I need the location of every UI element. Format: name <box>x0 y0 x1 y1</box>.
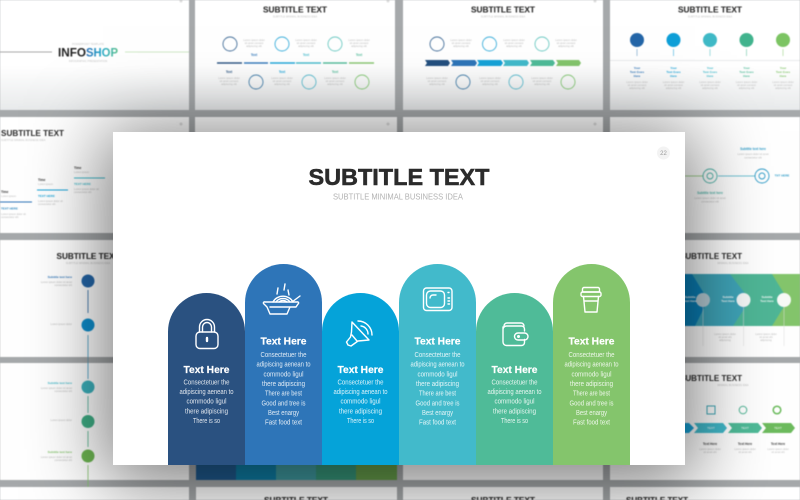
thumbnail: stepped timeline: Time <box>1 190 9 194</box>
text block: Fast food text <box>419 420 456 426</box>
text block: there adipiscing <box>570 381 613 388</box>
thumbnail: icons with chevrons: sit amet consect <box>452 41 471 45</box>
thumbnail: icons with chevrons: adipiscing elit <box>482 82 498 86</box>
text block: adipiscing aenean to <box>256 362 311 368</box>
thumbnail: icons with line bars: Text <box>251 53 258 57</box>
thumbnail: right circle flow: Lorem ipsum dolor sit amet <box>694 196 726 200</box>
thumbnail: icons with chevrons: sit amet consect <box>481 79 500 83</box>
text block <box>564 352 619 426</box>
thumbnail: vertical timeline: SUBTITLE TEXT <box>56 252 120 261</box>
thumbnail: icons with line bars: Lorem ipsum dolor <box>295 38 317 42</box>
panel: column 3 speaker <box>322 293 399 465</box>
heading: Text Here <box>414 336 461 348</box>
thumbnail: icons with line bars: Lorem ipsum dolor <box>271 76 293 80</box>
thumbnail: five circle pins: Here <box>707 74 714 78</box>
text block: commodo ligul <box>340 399 381 406</box>
text block: there adipiscing <box>339 408 382 416</box>
thumbnail: three chevrons with icons: Text Here <box>738 442 752 446</box>
text block: commodo ligul <box>494 399 535 406</box>
thumbnail: three chevrons with icons: TEXT <box>707 426 715 430</box>
thumbnail: right circle flow: TXT HERE <box>775 174 789 178</box>
thumbnail: icons with line bars: sit amet consect <box>350 41 369 45</box>
thumbnail: icons with chevrons <box>403 0 603 110</box>
text block: Good and tree is <box>416 400 460 407</box>
thumbnail: five circle pins: Text Goes <box>666 70 681 74</box>
thumbnail: icons with line bars: Text <box>332 70 339 74</box>
thumbnail: right circle flow: Lorem ipsum dolor sit amet <box>737 152 769 156</box>
thumbnail: three chevrons with icons: sit amet elit <box>703 450 717 454</box>
thumbnail: icons with chevrons: adipiscing elit <box>534 82 550 86</box>
text block <box>410 352 465 426</box>
text block: Good and tree is <box>570 400 614 407</box>
thumbnail: vertical timeline <box>41 252 120 500</box>
thumbnail: vertical timeline: Subtitle text here <box>48 275 72 279</box>
text block: There is so <box>501 418 528 425</box>
thumbnail: stepped timeline: SUBTITLE TEXT <box>1 129 64 138</box>
text block: commodo ligul <box>418 371 458 378</box>
thumbnail: vertical timeline: Lorem ipsum dolor <box>51 322 72 326</box>
thumbnail: icons with chevrons: adipiscing elit <box>506 44 522 48</box>
text block: Consectetuer the <box>492 380 538 386</box>
thumbnail: chevron gradient band: sit amet elit <box>759 335 773 339</box>
thumbnail: stepped timeline: Lorem ipsum dolor sit <box>1 212 26 216</box>
text block: adipiscing aenean to <box>564 362 619 368</box>
thumbnail: five circle pins: sit amet consect <box>774 83 793 87</box>
thumbnail: vertical timeline: Subtitle text here <box>48 450 72 454</box>
thumbnail: cover slide <box>0 0 189 110</box>
thumbnail: stepped timeline <box>0 129 105 219</box>
text block: there adipiscing <box>416 381 459 388</box>
thumbnail: icons with line bars: Text <box>226 70 233 74</box>
text block: commodo ligul <box>264 371 304 378</box>
text block: Best enargy <box>422 410 453 417</box>
thumbnail: vertical timeline: consectetur elit <box>55 389 72 393</box>
thumbnail: icons with line bars: SUBTITLE MINIMAL BUSINESS IDEA <box>273 14 317 18</box>
thumbnail: icons with line bars: Text <box>356 53 363 57</box>
thumbnail: icons with line bars: adipiscing elit <box>351 44 367 48</box>
page number badge <box>657 146 670 160</box>
panel: column 5 wallet <box>476 293 553 465</box>
thumbnail: icons with chevrons: Lorem ipsum dolor <box>426 76 448 80</box>
panel: column 4 television <box>399 264 476 465</box>
thumbnail: five circle pins: Your <box>707 66 714 70</box>
thumbnail: icons with line bars: Lorem ipsum dolor <box>243 38 265 42</box>
text block: There are best <box>573 390 610 398</box>
text block: adipiscing aenean to <box>410 362 465 368</box>
thumbnail: icons with line bars: Lorem ipsum dolor <box>324 76 346 80</box>
thumbnail: five circle pins: adipiscing elit <box>775 86 791 90</box>
text block: There are best <box>419 390 456 398</box>
main white slide panel <box>113 132 685 465</box>
text block: commodo ligul <box>572 371 612 378</box>
text block <box>256 352 311 426</box>
panel: column 6 coffee cup <box>553 264 630 465</box>
thumbnail: five circle pins: Lorem ipsum dolor <box>772 80 794 84</box>
thumbnail: right circle flow: consectetur elit <box>701 200 719 204</box>
thumbnail: dark chevron strip under main slide <box>196 460 397 480</box>
thumbnail: icons with line bars: Text <box>303 53 310 57</box>
thumbnail: icons with line bars: Lorem ipsum dolor <box>348 38 370 42</box>
thumbnail: five circle pins: Lorem ipsum dolor <box>699 80 721 84</box>
thumbnail: stepped timeline: Lorem ipsum <box>38 182 53 186</box>
thumbnail: five circle pins: Text Goes <box>703 70 717 74</box>
icon: padlock <box>196 320 218 348</box>
thumbnail: chevron gradient band: Text Here <box>760 299 774 303</box>
thumbnail: three chevrons with icons: MINIMAL BUSINESS IDEA <box>717 383 749 387</box>
page number badge: 22 <box>660 151 667 157</box>
thumbnail: icons with chevrons: adipiscing elit <box>453 44 469 48</box>
thumbnail: right circle flow: consectetur elit <box>744 156 762 160</box>
icon: television <box>424 288 452 310</box>
thumbnail: five circle pins: Your <box>670 66 678 70</box>
thumbnail: five circle pins: sit amet consect <box>701 83 720 87</box>
thumbnail: three chevrons with icons: sit amet elit <box>771 450 785 454</box>
thumbnail: five circle pins: Your <box>780 66 787 70</box>
text block: Good and tree is <box>262 400 306 407</box>
text block: Consectetuer the <box>184 380 230 386</box>
thumbnail: icons with line bars: Lorem ipsum dolor <box>218 76 240 80</box>
thumbnail: icons with chevrons: Lorem ipsum dolor <box>479 76 501 80</box>
text block: There is so <box>193 418 220 425</box>
text block: Best enargy <box>268 410 299 417</box>
thumbnail: chevron gradient band: Text Here <box>683 299 697 303</box>
thumbnail: icons with line bars: adipiscing elit <box>327 82 343 86</box>
thumbnail: stepped timeline: Lorem ipsum dolor sit <box>74 187 99 191</box>
thumbnail: five circle pins: SUBTITLE TEXT <box>678 6 742 14</box>
text block: there adipiscing <box>493 408 536 416</box>
thumbnail rows 3 and 4 tiles <box>0 240 800 480</box>
subtitle: SUBTITLE MINIMAL BUSINESS IDEA <box>333 192 463 202</box>
thumbnail: right circle flow <box>685 147 789 204</box>
thumbnail: icons with line bars: SUBTITLE TEXT <box>263 6 327 14</box>
text block: adipiscing aenean to <box>488 389 542 396</box>
thumbnail: icons with line bars: sit amet consect <box>273 79 292 83</box>
text block <box>334 380 388 425</box>
thumbnail: three chevrons with icons: Lorem ipsum dolor <box>734 447 756 451</box>
thumbnail: vertical timeline: Lorem ipsum dolor sit amet <box>41 455 72 459</box>
thumbnail: icons with line bars: sit amet consect <box>245 41 264 45</box>
thumbnail: vertical timeline: Subtitle text here <box>48 381 72 385</box>
thumbnail: three chevrons with icons: Text Here <box>771 442 785 446</box>
thumbnail: cover slide: POWERPOINT TEMPLATE <box>72 42 104 46</box>
text block: commodo ligul <box>186 399 227 406</box>
thumbnail: five circle pins: Text Goes <box>776 70 790 74</box>
thumbnail: five circle pins: adipiscing elit <box>629 86 645 90</box>
thumbnail: icons with chevrons: sit amet consect <box>533 79 552 83</box>
thumbnail: cover slide: SHOP <box>86 46 118 60</box>
text block: Consectetuer the <box>260 352 307 359</box>
thumbnail: right circle flow: Subtitle text here <box>697 191 723 195</box>
thumbnail: chevron gradient band: adipiscing <box>760 338 772 342</box>
thumbnail: stepped timeline: SUBTITLE MINIMAL BUSINESS IDEA <box>1 138 46 142</box>
thumbnail: stepped timeline: Lorem ipsum <box>1 194 16 198</box>
thumbnail: vertical timeline: Lorem ipsum dolor <box>51 418 72 422</box>
text block <box>488 380 542 425</box>
text block: Consectetuer the <box>414 352 461 359</box>
heading: Text Here <box>260 336 307 348</box>
thumbnail: icons with chevrons: SUBTITLE TEXT <box>471 6 535 14</box>
text block: Fast food text <box>265 420 302 426</box>
thumbnail: icons with chevrons: SUBTITLE MINIMAL BUSINESS IDEA <box>481 14 525 18</box>
thumbnail: chevron gradient band: Subtitle <box>684 295 696 299</box>
thumbnail: icons with chevrons: Lorem ipsum dolor <box>531 76 553 80</box>
thumbnail: icons with chevrons: Lorem ipsum dolor <box>503 38 525 42</box>
thumbnail: three chevrons with icons: sit amet elit <box>738 450 752 454</box>
thumbnail: stepped timeline: TEXT HERE <box>1 206 18 210</box>
text block: Fast food text <box>573 420 610 426</box>
thumbnail: cover slide: INFOGRAPHIC PRESENTATION <box>69 59 107 63</box>
thumbnail row 5 tiles <box>0 487 800 500</box>
thumbnail: icons with chevrons: adipiscing elit <box>429 82 445 86</box>
heading: Text Here <box>338 364 384 376</box>
thumbnail: icons with chevrons: Lorem ipsum dolor <box>555 38 577 42</box>
thumbnail: five circle pins: SUBTITLE MINIMAL BUSINESS IDEA <box>688 14 732 18</box>
text block: there adipiscing <box>262 381 305 388</box>
thumbnail: icons with line bars: adipiscing elit <box>274 82 290 86</box>
thumbnail: vertical timeline: consectetur elit <box>55 458 72 462</box>
thumbnail: five circle pins: Lorem ipsum dolor <box>663 80 684 84</box>
icon: wallet <box>503 323 528 346</box>
thumbnail: three chevrons with icons: SUBTITLE TEXT <box>680 374 742 383</box>
thumbnail: five circle pins: Lorem ipsum dolor <box>736 80 757 84</box>
thumbnail: five circle pins: sit amet consect <box>737 83 756 87</box>
thumbnail: chevron gradient band: adipiscing <box>719 338 731 342</box>
thumbnail: stepped timeline: Lorem ipsum dolor sit <box>38 199 63 203</box>
thumbnail: five circle pins: Lorem ipsum dolor <box>626 80 648 84</box>
thumbnail: five circle pins: adipiscing elit <box>739 86 755 90</box>
thumbnail: chevron gradient band: Subtitle <box>762 295 773 299</box>
thumbnail: icons with chevrons: sit amet consect <box>428 79 447 83</box>
thumbnail: five circle pins: Here <box>743 74 750 78</box>
thumbnail: five circle pins: Your <box>634 66 641 70</box>
thumbnail: icons with chevrons: adipiscing elit <box>558 44 574 48</box>
icon: speaker <box>346 321 372 346</box>
thumbnail: three chevrons with icons: Lorem ipsum dolor <box>767 447 789 451</box>
thumbnail: icons with line bars <box>195 0 395 110</box>
thumbnail: stepped timeline: Lorem ipsum <box>74 170 89 174</box>
text block: Consectetuer the <box>568 352 615 359</box>
thumbnail: five circle pins: adipiscing elit <box>666 86 682 90</box>
thumbnail: chevron gradient band: sit amet elit <box>718 335 732 339</box>
thumbnail: chevron gradient band: SUBTITLE TEXT <box>680 252 742 261</box>
text block: Consectetuer the <box>338 380 384 386</box>
thumbnail: chevron gradient band: Text Here <box>721 299 735 303</box>
text block: adipiscing aenean to <box>334 389 388 396</box>
thumbnail: icons with line bars: adipiscing elit <box>246 44 262 48</box>
panel: column 2 noodles <box>245 264 322 465</box>
thumbnail: stepped timeline: TEXT HERE <box>74 182 91 186</box>
thumbnail row 2 tiles behind main slide <box>0 117 800 233</box>
text block: adipiscing aenean to <box>180 389 234 396</box>
thumbnail: icons with line bars: adipiscing elit <box>298 44 314 48</box>
thumbnail: vertical timeline: Lorem ipsum dolor sit amet <box>41 386 72 390</box>
icon: takeaway cup <box>581 288 601 312</box>
thumbnail: three chevrons with icons <box>680 374 795 454</box>
thumbnail: five circle pins: sit amet consect <box>664 83 683 87</box>
thumbnail: three chevrons with icons: TEXT <box>741 426 749 430</box>
thumbnail: icons with line bars: sit amet consect <box>220 79 239 83</box>
thumbnail: three chevrons with icons: Text Here <box>703 442 717 446</box>
thumbnail: five circle pins: Text Goes <box>739 70 754 74</box>
thumbnail: five circle pins: Here <box>634 74 641 78</box>
thumbnail: vertical timeline: Lorem ipsum dolor sit amet <box>41 280 72 284</box>
heading: Text Here <box>492 364 538 376</box>
thumbnail: stepped timeline: consectetur elit <box>38 202 56 206</box>
thumbnail: vertical timeline: SUBTITLE MINIMAL BUSINESS IDEA <box>66 261 110 265</box>
thumbnail: chevron gradient band: Subtitle <box>722 295 734 299</box>
thumbnail: five circle pins: sit amet consect <box>628 83 647 87</box>
heading: Text Here <box>184 364 230 376</box>
thumbnail: icons with chevrons: sit amet consect <box>557 41 576 45</box>
thumbnail: chevron gradient band <box>680 252 800 346</box>
thumbnail: icons with line bars: Text <box>279 70 286 74</box>
text block: There are best <box>265 390 302 398</box>
thumbnail: icons with chevrons: sit amet consect <box>505 41 524 45</box>
thumbnail: three chevrons with icons: Lorem ipsum dolor <box>699 447 721 451</box>
thumbnail: five circle pins: Here <box>780 74 787 78</box>
thumbnail: icons with line bars: adipiscing elit <box>221 82 237 86</box>
thumbnail: stepped timeline: TEXT HERE <box>38 194 55 198</box>
heading: Text Here <box>568 336 615 348</box>
panel: column 1 lock <box>168 293 245 465</box>
text block: Best enargy <box>576 410 607 417</box>
thumbnail: stepped timeline: Time <box>74 166 82 170</box>
thumbnail: five circle pins <box>610 0 800 110</box>
thumbnail: vertical timeline: consectetur elit <box>55 283 72 287</box>
thumbnail: chevron gradient band: Lorem ipsum dolor <box>755 332 777 336</box>
thumbnail: chevron gradient band: MINIMAL BUSINESS IDEA <box>717 261 749 265</box>
thumbnail: icons with chevrons: Lorem ipsum dolor <box>450 38 472 42</box>
thumbnail: five circle pins: Text Goes <box>630 70 644 74</box>
thumbnail: right circle flow: Subtitle text here <box>740 147 766 151</box>
thumbnail: cover slide: INFO <box>58 46 86 60</box>
thumbnail: stepped timeline: Time <box>38 178 46 182</box>
thumbnail: five circle pins: Here <box>670 74 677 78</box>
thumbnail: five circle pins: Your <box>743 66 751 70</box>
text block: There is so <box>347 418 374 425</box>
thumbnail: icons with line bars: sit amet consect <box>297 41 316 45</box>
thumbnail: three chevrons with icons: TEXT <box>774 426 782 430</box>
thumbnail: icons with line bars: sit amet consect <box>326 79 345 83</box>
thumbnail: chevron gradient band: Lorem ipsum dolor <box>714 332 736 336</box>
title: SUBTITLE TEXT <box>308 164 490 190</box>
text block: there adipiscing <box>185 408 228 416</box>
thumbnail: stepped timeline: consectetur elit <box>74 190 92 194</box>
thumbnail: stepped timeline: consectetur elit <box>1 215 19 219</box>
thumbnail: five circle pins: adipiscing elit <box>702 86 718 90</box>
text block <box>180 380 234 425</box>
icon: noodle bowl <box>263 284 300 314</box>
